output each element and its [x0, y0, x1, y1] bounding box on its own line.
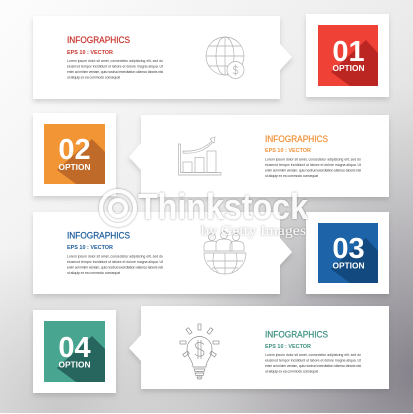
- watermark name: Thinkstock: [138, 186, 309, 227]
- icon: people on globe: [204, 232, 246, 274]
- number: 04: 04: [58, 332, 91, 364]
- text block: option 01: [67, 59, 163, 80]
- subheading: option 02: EPS 10 : VECTOR: [265, 148, 311, 154]
- subheading: option 01: EPS 10 : VECTOR: [67, 50, 113, 56]
- icon: globe with dollar coin: [206, 37, 244, 78]
- text block: option 02: Lorem ipsum dolor sit amet, consectetur adipisicing elit, sed do: [265, 158, 361, 162]
- text block: option 01: Lorem ipsum dolor sit amet, consectetur adipisicing elit, sed do: [67, 59, 163, 63]
- number: 01: 01: [332, 36, 365, 68]
- watermark: [101, 186, 309, 239]
- text block: option 03: eiusmod tempor incididunt ut labore et dolore magna aliqua. Ut: [67, 260, 163, 264]
- watermark logo: [101, 191, 135, 225]
- text block: option 01: ut aliquip ex ea commodo consequat: [67, 76, 120, 80]
- badge square: 02: [44, 124, 105, 184]
- heading: option 01: INFOGRAPHICS: [67, 35, 130, 46]
- panel: option 01 text: [33, 16, 292, 99]
- text block: option 02: [265, 158, 361, 178]
- text block: option 03: [67, 254, 163, 275]
- text block: option 03: enim ad minim veniam, quis nostrud exercitation ullamco laboris nisi: [67, 266, 163, 270]
- badge square: 01: [318, 25, 378, 86]
- badge square: 03: [318, 223, 378, 283]
- icon: rising bar chart: [178, 137, 221, 175]
- label: option: OPTION: [332, 262, 365, 270]
- text block: option 04: [265, 353, 361, 374]
- card: option 03: [306, 212, 389, 294]
- subheading: option 04: EPS 10 : VECTOR: [265, 344, 311, 350]
- text block: option 04: ut aliquip ex ea commodo consequat: [265, 370, 318, 374]
- watermark credit: by Getty Images: [201, 224, 306, 239]
- text block: option 03: Lorem ipsum dolor sit amet, consectetur adipisicing elit, sed do: [67, 254, 163, 258]
- heading: option 04: INFOGRAPHICS: [265, 330, 328, 340]
- card: option 04: [33, 310, 116, 393]
- text block: option 04: eiusmod tempor incididunt ut labore et dolore magna aliqua. Ut: [265, 358, 361, 362]
- text block: option 01: eiusmod tempor incididunt ut labore et dolore magna aliqua. Ut: [67, 64, 163, 68]
- number: 03: 03: [332, 233, 365, 265]
- text block: option 04: Lorem ipsum dolor sit amet, consectetur adipisicing elit, sed do: [265, 353, 361, 357]
- number: 02: 02: [58, 134, 91, 166]
- label: option: OPTION: [332, 64, 365, 73]
- label: option: OPTION: [58, 163, 91, 172]
- card: option 01: [306, 14, 389, 97]
- text block: option 02: ut aliquip ex ea commodo consequat: [265, 174, 318, 178]
- text block: option 04: enim ad minim veniam, quis nostrud exercitation ullamco laboris nisi: [265, 364, 361, 368]
- icon: light bulb with dollar sign: [180, 324, 219, 379]
- panel: option 03 text: [33, 212, 292, 294]
- heading: option 03: INFOGRAPHICS: [67, 230, 130, 242]
- text block: option 02: eiusmod tempor incididunt ut labore et dolore magna aliqua. Ut: [265, 163, 361, 167]
- panel: option 04 text: [129, 306, 389, 389]
- badge square: 04: [44, 321, 105, 382]
- label: option: OPTION: [58, 360, 91, 370]
- panel: option 02 text: [129, 115, 389, 197]
- text block: option 01: enim ad minim veniam, quis nostrud exercitation ullamco laboris nisi: [67, 70, 163, 74]
- text block: option 03: ut aliquip ex ea commodo consequat: [67, 271, 120, 275]
- card: option 02: [33, 113, 116, 196]
- heading: option 02: INFOGRAPHICS: [265, 134, 328, 145]
- text block: option 02: enim ad minim veniam, quis nostrud exercitation ullamco laboris nisi: [265, 168, 361, 172]
- subheading: option 03: EPS 10 : VECTOR: [67, 245, 113, 251]
